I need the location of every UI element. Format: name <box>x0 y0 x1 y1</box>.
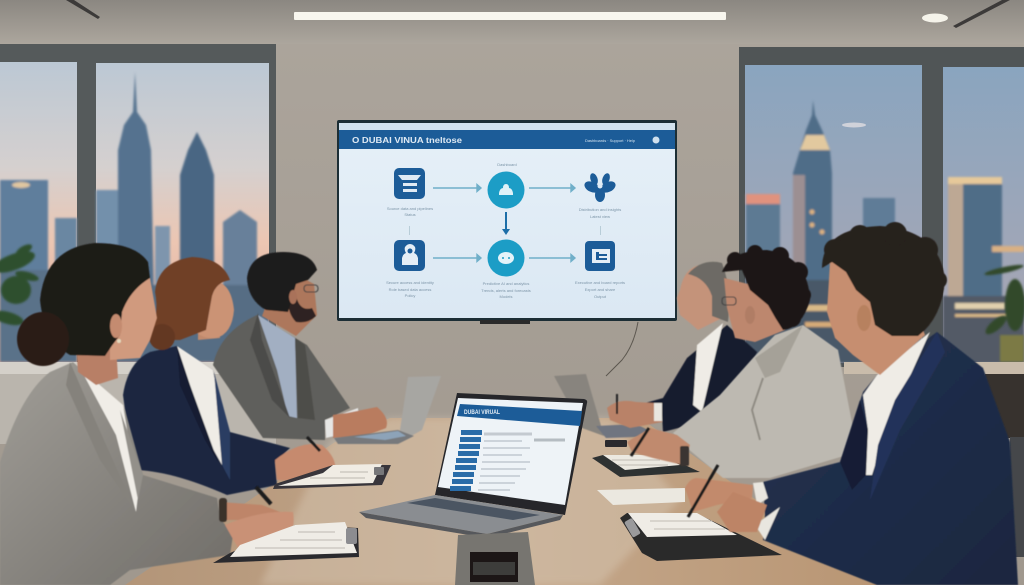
person: woman left foreground <box>0 243 294 585</box>
screen captions: Policy <box>405 293 415 298</box>
wall screen <box>337 120 677 324</box>
notebook: middle left <box>273 464 391 489</box>
table grommet <box>455 532 535 585</box>
person: man in navy suit foreground <box>685 222 1018 585</box>
plant left <box>0 242 40 328</box>
screen captions: Export and share <box>585 287 616 292</box>
hand with watch: grey-shirt man <box>627 428 690 466</box>
notepad: right foreground <box>620 513 782 561</box>
screen captions: Status <box>404 212 416 217</box>
arrows <box>433 184 575 262</box>
person: man in grey suit back left <box>213 252 387 440</box>
notebook: left foreground <box>213 522 359 563</box>
chair right <box>1010 437 1024 557</box>
screen header: O DUBAI VINUA tneltose <box>352 135 462 145</box>
screen captions: Predictive AI and analytics <box>483 281 529 286</box>
left window <box>0 44 276 444</box>
center laptop <box>359 393 587 538</box>
skyline left <box>0 72 269 362</box>
laptop: back right <box>554 374 660 438</box>
top row icons <box>394 168 425 199</box>
screen captions: Output <box>594 294 607 299</box>
laptop: back left <box>334 376 441 444</box>
right window <box>739 47 1024 438</box>
screen captions: Latest view <box>590 214 610 219</box>
screen captions: Models <box>500 294 512 299</box>
wall screen: Dashboards · Support · Help <box>585 138 636 143</box>
plant right <box>983 263 1024 362</box>
phone <box>605 440 627 447</box>
conference table <box>125 418 877 585</box>
loose paper <box>597 488 685 505</box>
person: older woman back right <box>607 262 757 432</box>
notebook: middle right <box>592 455 700 477</box>
screen captions: Executive and board reports <box>575 280 625 285</box>
person: woman in navy blazer <box>123 257 335 495</box>
bottom row icons <box>394 240 425 271</box>
screen captions: Distribution and insights <box>579 207 621 212</box>
person: man in grey shirt back right <box>673 245 853 478</box>
screen captions: Trends, alerts and forecasts <box>481 288 531 293</box>
screen captions: Secure access and identity <box>386 280 434 285</box>
screen captions: Dashboard <box>497 162 517 167</box>
screen captions: Role based data access <box>389 287 431 292</box>
center laptop: DUBAI VIRUAL <box>464 409 500 416</box>
ceiling <box>0 0 1024 44</box>
screen captions <box>386 162 625 299</box>
screen captions: Source data and pipelines <box>387 206 433 211</box>
